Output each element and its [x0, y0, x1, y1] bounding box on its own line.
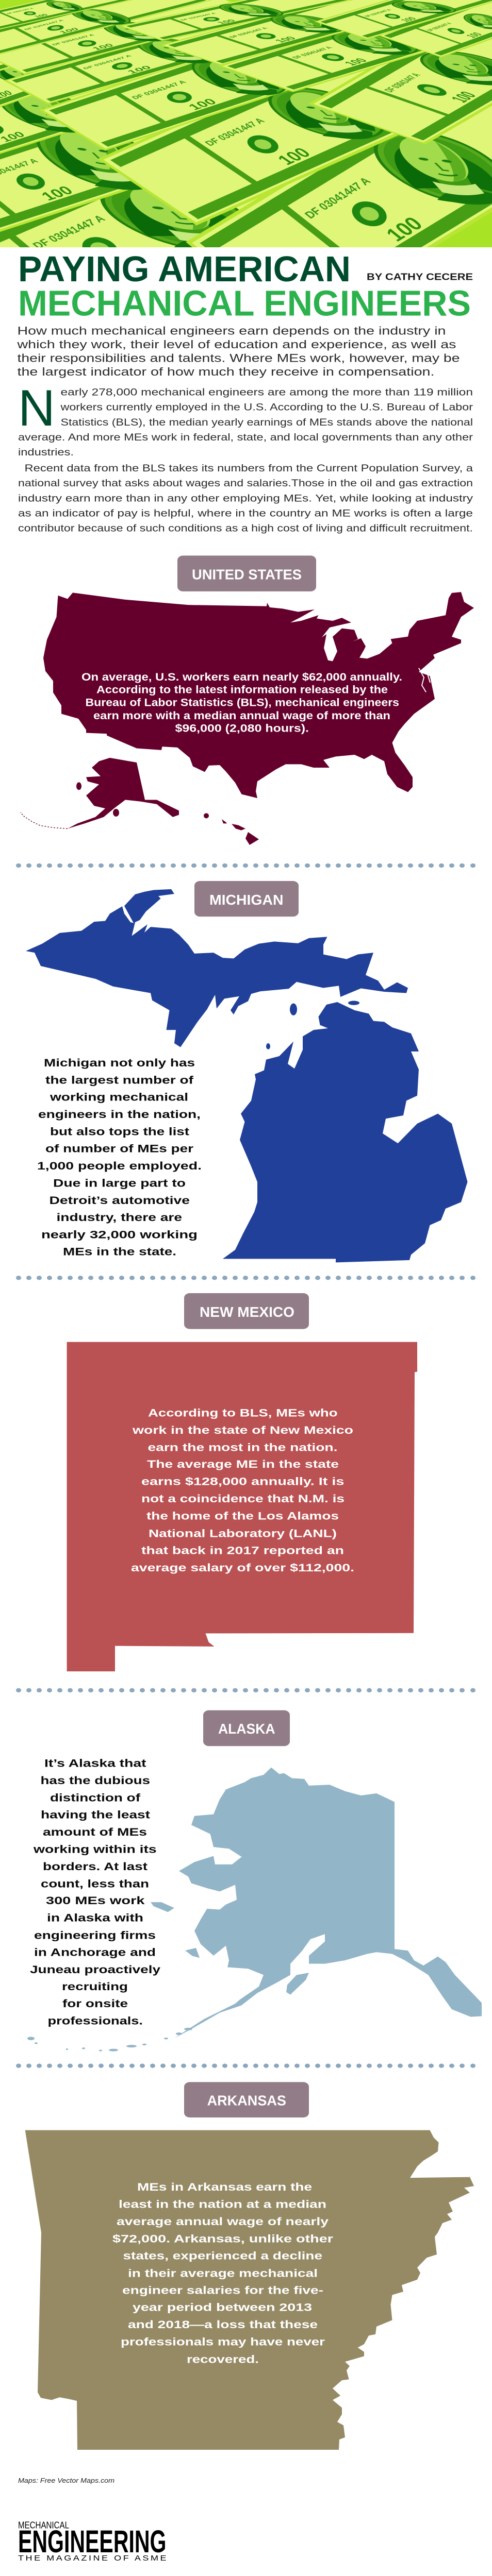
- callout: new mexico: National Laboratory (LANL): [149, 1527, 337, 1539]
- callout: new mexico: average salary of over $112,000.: [131, 1562, 354, 1574]
- article body text: workers currently employed in the U.S. According to the U.S. Bureau of Labor: [60, 401, 473, 413]
- article body text: Recent data from the BLS takes its numbers from the Current Population Survey, a: [25, 462, 473, 474]
- badge: alaska: [203, 1710, 290, 1746]
- drop cap: N: [18, 380, 55, 437]
- map: alaska: [27, 1768, 482, 2052]
- callout: new mexico: The average ME in the state: [147, 1458, 339, 1470]
- article body text: industry earn more than in any other employing MEs. Yet, while looking at industry: [18, 492, 473, 504]
- map: michigan: [26, 889, 467, 1262]
- callout: united states: According to the latest information released by the: [96, 684, 388, 696]
- badge: alaska: ALASKA: [218, 1721, 275, 1737]
- text: alaska: professionals.: [48, 2015, 143, 2027]
- callout: arkansas: in their average mechanical: [128, 2267, 318, 2279]
- panel: arkansas: [25, 2082, 474, 2450]
- callout: arkansas: $72,000. Arkansas, unlike other: [112, 2232, 333, 2245]
- title: PAYING AMERICAN: [18, 249, 351, 289]
- badge: arkansas: [184, 2082, 309, 2117]
- text: michigan: Michigan not only has: [44, 1057, 195, 1069]
- panel: new mexico: [67, 1293, 417, 1671]
- callout: arkansas: year period between 2013: [133, 2301, 312, 2313]
- intro text: their responsibilities and talents. Where MEs work, however, may be: [18, 352, 460, 365]
- article body text: contributor because of such conditions as a high cost of living and difficult recruitment.: [18, 522, 473, 534]
- text: michigan: MEs in the state.: [63, 1245, 176, 1258]
- map: contiguous united states: [43, 592, 474, 798]
- map: new mexico: [67, 1342, 417, 1671]
- logo: mechanical engineering: [18, 2520, 167, 2563]
- text: alaska: distinction of: [50, 1792, 140, 1804]
- badge: michigan: [194, 881, 299, 917]
- callout: united states: [81, 671, 402, 734]
- credit: maps: Maps: Free Vector Maps.com: [18, 2477, 114, 2484]
- article body text: as an indicator of pay is helpful, where in the country an ME works is often a large: [18, 507, 473, 519]
- badge: new mexico: [184, 1293, 309, 1329]
- text: alaska: [30, 1757, 160, 2027]
- intro text: How much mechanical engineers earn depends on the industry in: [18, 325, 446, 337]
- text: michigan: of number of MEs per: [45, 1143, 193, 1155]
- callout: new mexico: earn the most in the nation.: [148, 1441, 337, 1453]
- text: alaska: having the least: [41, 1809, 150, 1821]
- callout: new mexico: the home of the Los Alamos: [146, 1510, 339, 1522]
- callout: arkansas: states, experienced a decline: [123, 2250, 322, 2262]
- text: michigan: working mechanical: [50, 1091, 188, 1103]
- byline: BY CATHY CECERE: [367, 272, 473, 282]
- text: alaska: in Anchorage and: [34, 1946, 156, 1958]
- text: michigan: engineers in the nation,: [38, 1108, 201, 1121]
- callout: arkansas: MEs in Arkansas earn the: [137, 2181, 312, 2193]
- text: alaska: count, less than: [41, 1877, 149, 1890]
- article body text: Statistics (BLS), the median yearly earnings of MEs stands above the national: [61, 416, 473, 428]
- callout: new mexico: According to BLS, MEs who: [148, 1406, 338, 1419]
- text: michigan: but also tops the list: [50, 1125, 189, 1138]
- text: alaska: borders. At last: [43, 1860, 147, 1873]
- panel: alaska: [27, 1710, 482, 2052]
- callout: arkansas: average annual wage of nearly: [117, 2215, 329, 2228]
- article body text: [18, 386, 473, 534]
- text: alaska: It’s Alaska that: [44, 1757, 146, 1769]
- text: alaska: engineering firms: [34, 1929, 156, 1941]
- logo: mechanical engineering: ENGINEERING: [18, 2524, 167, 2560]
- badge: michigan: MICHIGAN: [209, 893, 284, 908]
- text: alaska: Juneau proactively: [30, 1963, 160, 1976]
- badge: united states: UNITED STATES: [192, 567, 302, 583]
- callout: united states: On average, U.S. workers earn nearly $62,000 annually.: [81, 671, 402, 683]
- callout: arkansas: [112, 2181, 333, 2365]
- logo: mechanical engineering: MECHANICAL: [18, 2520, 69, 2531]
- callout: new mexico: earns $128,000 annually. It is: [141, 1475, 344, 1487]
- panel: united states: [21, 555, 474, 845]
- logo: mechanical engineering: THE MAGAZINE OF ASME: [18, 2553, 167, 2563]
- callout: united states: $96,000 (2,080 hours).: [175, 722, 309, 734]
- text: michigan: the largest number of: [45, 1074, 193, 1086]
- map: hawaii inset: [204, 813, 259, 845]
- callout: new mexico: that back in 2017 reported an: [141, 1545, 344, 1556]
- title: [18, 249, 471, 324]
- intro text: which they work, their level of education and experience, as well as: [17, 338, 456, 351]
- text: alaska: working within its: [33, 1843, 157, 1855]
- intro text: [17, 325, 460, 379]
- badge: united states: [177, 555, 316, 591]
- image: banner of green hundred dollar bills: [0, 0, 492, 247]
- callout: united states: earn more with a median annual wage of more than: [93, 709, 390, 721]
- article body text: industries.: [18, 446, 74, 458]
- article body text: average. And more MEs work in federal, state, and local governments than any other: [18, 431, 473, 443]
- text: michigan: Detroit’s automotive: [50, 1194, 190, 1207]
- text: alaska: amount of MEs: [43, 1826, 147, 1838]
- text: alaska: 300 MEs work: [46, 1894, 145, 1907]
- badge: new mexico: NEW MEXICO: [200, 1304, 294, 1320]
- callout: arkansas: least in the nation at a median: [119, 2198, 326, 2210]
- text: michigan: Due in large part to: [53, 1177, 186, 1189]
- panel: michigan: [26, 881, 467, 1262]
- text: alaska: in Alaska with: [47, 1912, 143, 1924]
- text: michigan: nearly 32,000 working: [41, 1228, 198, 1241]
- text: alaska: for onsite: [62, 1997, 128, 2009]
- text: michigan: 1,000 people employed.: [37, 1160, 202, 1172]
- text: alaska: recruiting: [62, 1980, 128, 1993]
- callout: arkansas: and 2018—a loss that these: [128, 2318, 318, 2331]
- article body text: early 278,000 mechanical engineers are among the more than 119 million: [61, 386, 473, 398]
- map: alaska inset: [21, 758, 179, 828]
- callout: new mexico: [131, 1406, 354, 1574]
- map: arkansas: [25, 2130, 474, 2450]
- article body text: national survey that asks about wages and salaries.Those in the oil and gas extraction: [18, 477, 473, 489]
- callout: new mexico: not a coincidence that N.M. is: [141, 1493, 345, 1505]
- intro text: the largest indicator of how much they receive in compensation.: [18, 366, 435, 379]
- callout: united states: Bureau of Labor Statistics (BLS), mechanical engineers: [86, 696, 399, 708]
- callout: arkansas: recovered.: [187, 2353, 259, 2365]
- text: michigan: industry, there are: [57, 1211, 182, 1224]
- callout: arkansas: professionals may have never: [121, 2335, 325, 2348]
- text: alaska: has the dubious: [41, 1774, 150, 1787]
- text: michigan: [37, 1057, 202, 1258]
- callout: arkansas: engineer salaries for the five-: [122, 2284, 323, 2296]
- badge: arkansas: ARKANSAS: [207, 2093, 286, 2109]
- callout: new mexico: work in the state of New Mexico: [132, 1424, 353, 1436]
